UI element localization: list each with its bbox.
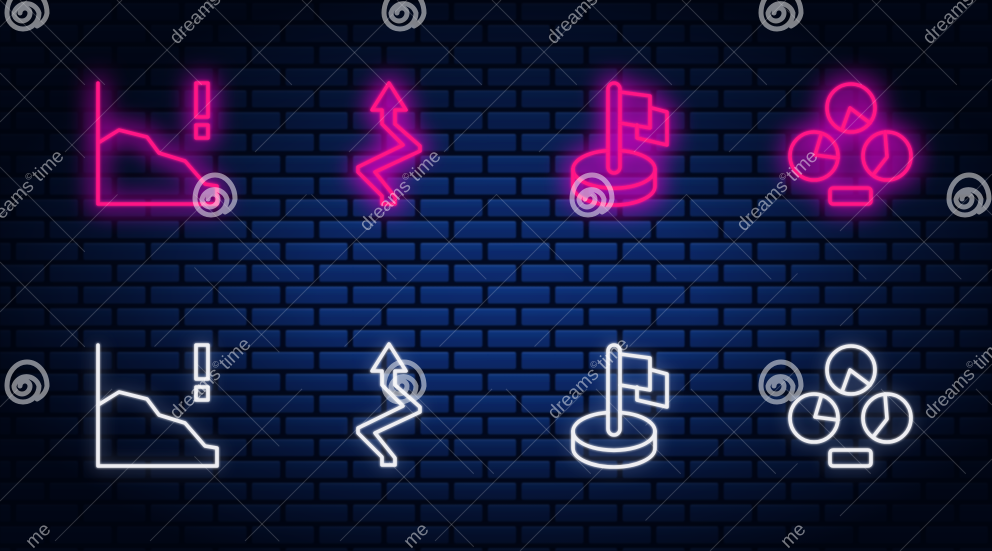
watermark: dreamstime text: time [28,146,68,186]
watermark: dreamstime text: dreams [166,364,225,424]
watermark: dreamstime text: time [593,334,633,374]
watermark: dreamstime text: © [400,170,412,182]
watermark: dreamstime text: © [964,358,976,370]
icon: white winding road arrow [358,344,420,465]
watermark: spiral logos [7,0,989,402]
watermark: dreamstime text: © [588,358,600,370]
watermark: dreamstime text: time [782,146,822,186]
icon: pink declining chart with exclamation mark [98,83,217,204]
watermark: dreamstime text: dreams [920,364,979,424]
icon: white three pie charts with minus sign [790,346,911,466]
icon: white flag on round base [573,345,667,467]
icon: white declining chart with exclamation mark [98,345,217,466]
watermark: dreamstime text: dreams [733,176,792,236]
watermark: dreamstime text: © [777,170,789,182]
icon: pink winding road arrow [358,83,420,204]
watermark: dreamstime text: dreams [544,364,603,424]
icon: pink three pie charts with minus sign [790,84,911,204]
watermark: dreamstime text: time [405,146,445,186]
watermark: dreamstime text: time [215,334,255,374]
watermark: dreamstime text: © [210,358,222,370]
watermark: dreamstime text: © [23,170,35,182]
watermark: dreamstime text: dreams [356,176,415,236]
icon: pink flag on round base [573,83,667,205]
